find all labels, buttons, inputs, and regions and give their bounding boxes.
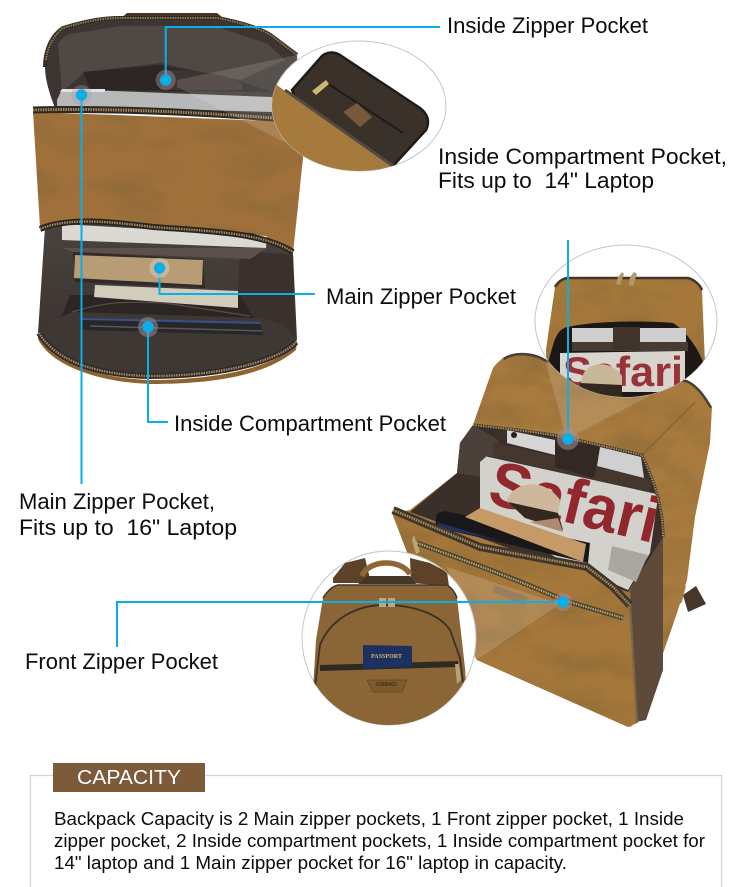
tablet: [435, 511, 590, 563]
magnifier: front pocket with passport: PASSPORT: [371, 653, 403, 660]
beam to magnifier: laptop compartment: [545, 360, 650, 436]
capacity heading: CAPACITY: [77, 767, 181, 789]
band zipper: [33, 109, 300, 120]
label: main zipper pocket: Main Zipper Pocket: [326, 284, 517, 309]
upper flap lining: [45, 18, 300, 118]
flap zipper: [393, 510, 630, 605]
front flap: [390, 505, 640, 730]
magnifier: laptop compartment: [535, 245, 717, 405]
right open backpack: [385, 345, 720, 730]
label: front zipper pocket: Front Zipper Pocket: [25, 649, 219, 674]
top handle: [120, 13, 231, 24]
lower compartment: [38, 220, 297, 340]
panel: capacity: [30, 763, 722, 887]
side panel: [630, 533, 663, 722]
opening zipper: [473, 425, 663, 537]
lower zipper: [40, 221, 293, 252]
sleeve flap: [72, 302, 250, 316]
magnifier: laptop compartment: Safari: [563, 348, 683, 395]
magnifier: front pocket with passport: [302, 551, 480, 735]
callout line: inside compartment pocket 14 inch laptop: [557, 240, 579, 450]
laptop: [57, 89, 272, 112]
flap zipper: [45, 18, 297, 67]
callout line: main zipper pocket 16 inch laptop: [72, 85, 92, 484]
label: main zipper pocket 16 inch: Fits up to 16" Laptop: [19, 515, 237, 540]
white book: [62, 224, 267, 248]
laptop sleeve strip and tab: [493, 442, 652, 492]
label: inside compartment pocket 14 inch: Fits up to 14" Laptop: [438, 168, 654, 193]
capacity heading: [53, 763, 205, 792]
beam to magnifier: inside zipper pocket: [177, 55, 330, 160]
embossed logo: [492, 585, 528, 605]
leather body: [385, 345, 720, 730]
label: inside compartment pocket 14 inch: [438, 144, 727, 193]
leather band: [30, 105, 310, 255]
panel border: [30, 776, 722, 887]
right edge zipper: [630, 605, 637, 723]
right open backpack: Safari: [483, 447, 667, 557]
zipper pull: [412, 535, 420, 554]
label: main zipper pocket 16 inch: [19, 489, 237, 540]
tan book: [465, 508, 586, 562]
callout line: front zipper pocket: [117, 593, 572, 647]
capacity description: zipper pocket, 2 Inside compartment pockets, 1 Inside compartment pocket for: [54, 831, 705, 851]
interior: [410, 425, 663, 592]
beam to magnifier: front pocket: [447, 567, 560, 660]
capacity description: [54, 809, 705, 873]
magnifier: front pocket with passport: GOBIDAGO: [376, 682, 397, 688]
magazine small print: [608, 546, 648, 582]
label: inside compartment pocket: Inside Compartment Pocket: [174, 411, 447, 436]
label: inside zipper pocket: Inside Zipper Pocket: [447, 13, 649, 38]
cap and face on magazine: [507, 484, 560, 513]
label: main zipper pocket 16 inch: Main Zipper Pocket,: [19, 489, 215, 514]
pale book: [94, 285, 238, 308]
base rim: [38, 333, 297, 384]
magnifier: inside zipper pocket: [262, 41, 446, 175]
callout line: inside compartment pocket: [138, 317, 168, 422]
strap: [683, 586, 706, 612]
tan book: [73, 252, 205, 288]
callout line: inside zipper pocket: [156, 27, 440, 90]
magazine strip: [63, 248, 267, 259]
top-view open backpack: [30, 13, 310, 384]
magazine: [480, 456, 658, 590]
capacity description: Backpack Capacity is 2 Main zipper pockets, 1 Front zipper pocket, 1 Inside: [54, 809, 684, 829]
callout line: main zipper pocket: [150, 258, 315, 294]
tablet: [80, 320, 263, 335]
capacity description: 14" laptop and 1 Main zipper pocket for 16" laptop in capacity.: [54, 853, 567, 873]
inside zipper pocket: [83, 65, 272, 92]
label: inside compartment pocket 14 inch: Inside Compartment Pocket,: [438, 144, 727, 169]
base: [38, 312, 297, 378]
front pocket zipper: [417, 543, 623, 618]
laptop: [507, 430, 555, 455]
